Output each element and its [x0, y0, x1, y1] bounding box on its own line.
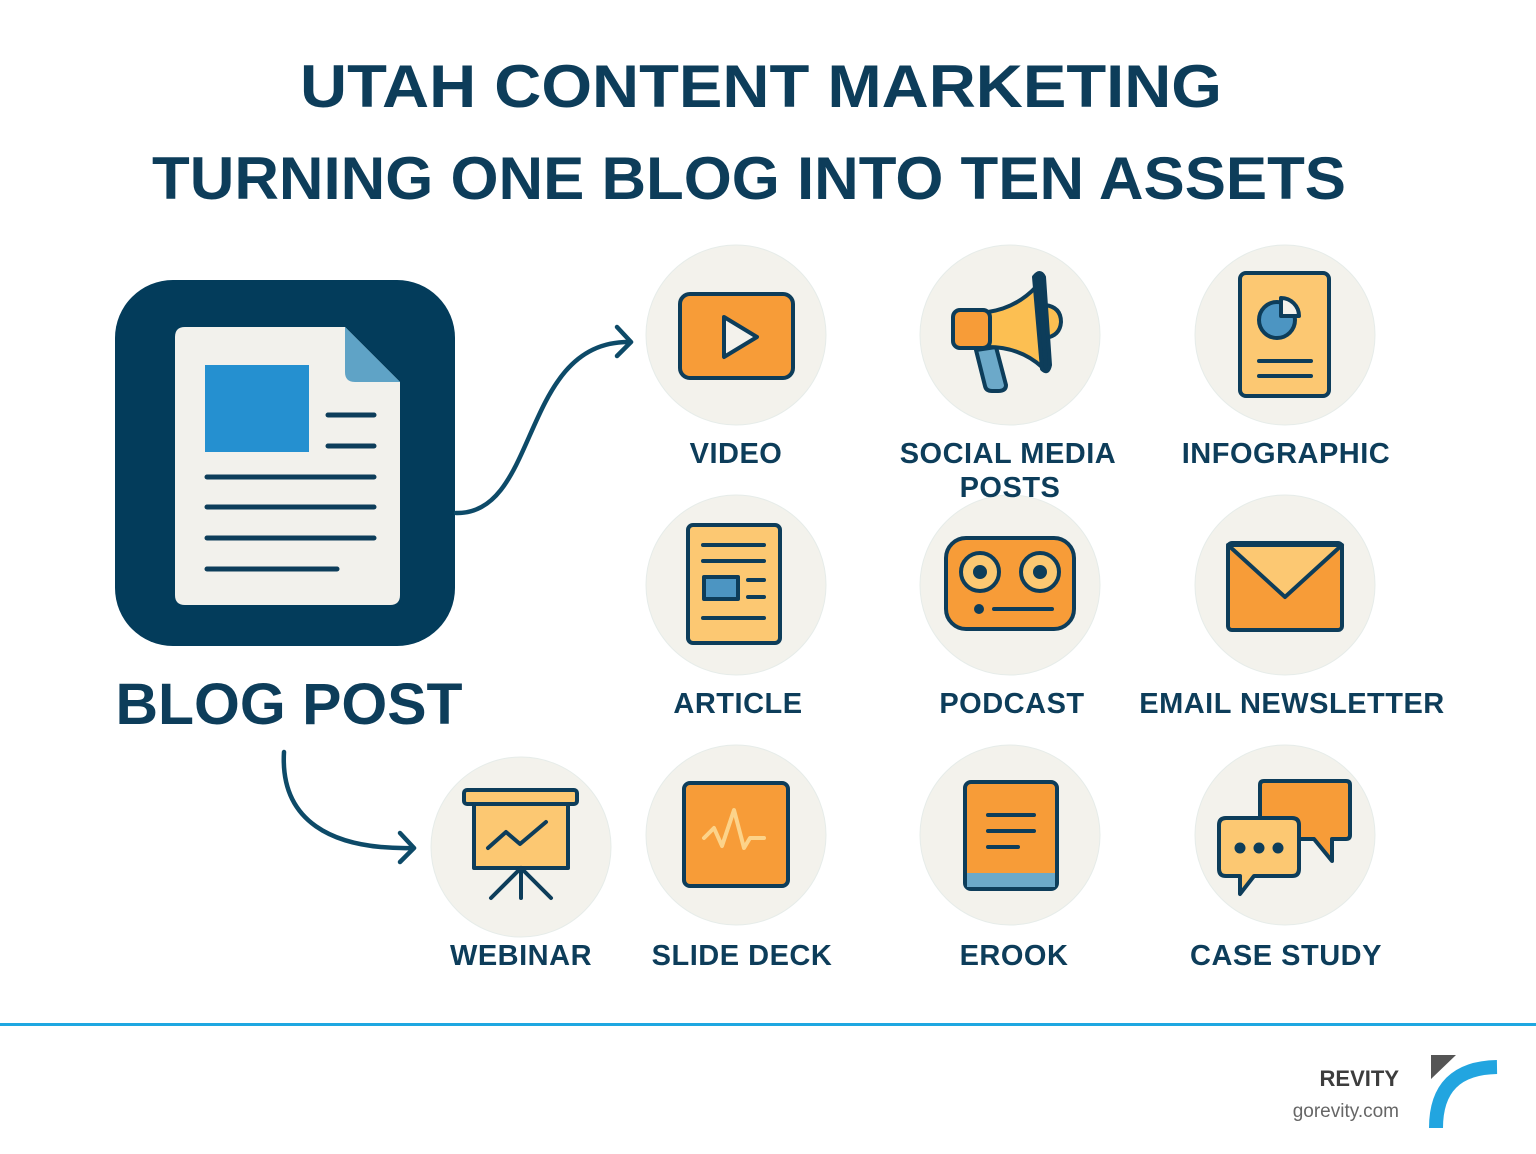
icon: megaphone	[953, 273, 1061, 391]
labels: SOCIAL MEDIA	[900, 438, 1116, 470]
labels: EROOK	[960, 940, 1068, 972]
labels: CASE STUDY	[1190, 940, 1382, 972]
labels	[450, 438, 1445, 972]
icon: slide deck	[684, 783, 788, 886]
icon: infographic	[1240, 273, 1329, 396]
circles	[431, 245, 1375, 937]
arrow: to webinar	[284, 752, 414, 862]
labels: POSTS	[960, 472, 1060, 504]
heading: blog post: BLOG POST	[116, 672, 463, 737]
labels: SLIDE DECK	[652, 940, 832, 972]
icon: article	[688, 525, 780, 643]
labels: INFOGRAPHIC	[1182, 438, 1390, 470]
icon: podcast	[946, 538, 1074, 629]
logo: revity: REVITY	[1320, 1066, 1399, 1091]
labels: ARTICLE	[673, 688, 803, 720]
labels: VIDEO	[690, 438, 782, 470]
logo: revity	[1293, 1055, 1497, 1128]
panel: blog post icon	[115, 280, 455, 646]
title: UTAH CONTENT MARKETING	[300, 53, 1222, 120]
icon: email	[1228, 543, 1342, 630]
logo: revity: gorevity.com	[1293, 1101, 1399, 1122]
icon: video	[680, 294, 793, 378]
icon: webinar	[464, 790, 577, 898]
title	[152, 53, 1346, 212]
icon: ebook	[965, 782, 1057, 889]
title: TURNING ONE BLOG INTO TEN ASSETS	[152, 145, 1346, 212]
arrow: to video	[456, 327, 631, 513]
labels: EMAIL NEWSLETTER	[1139, 688, 1445, 720]
labels: WEBINAR	[450, 940, 592, 972]
labels: PODCAST	[939, 688, 1085, 720]
icon: case study	[1219, 781, 1350, 894]
